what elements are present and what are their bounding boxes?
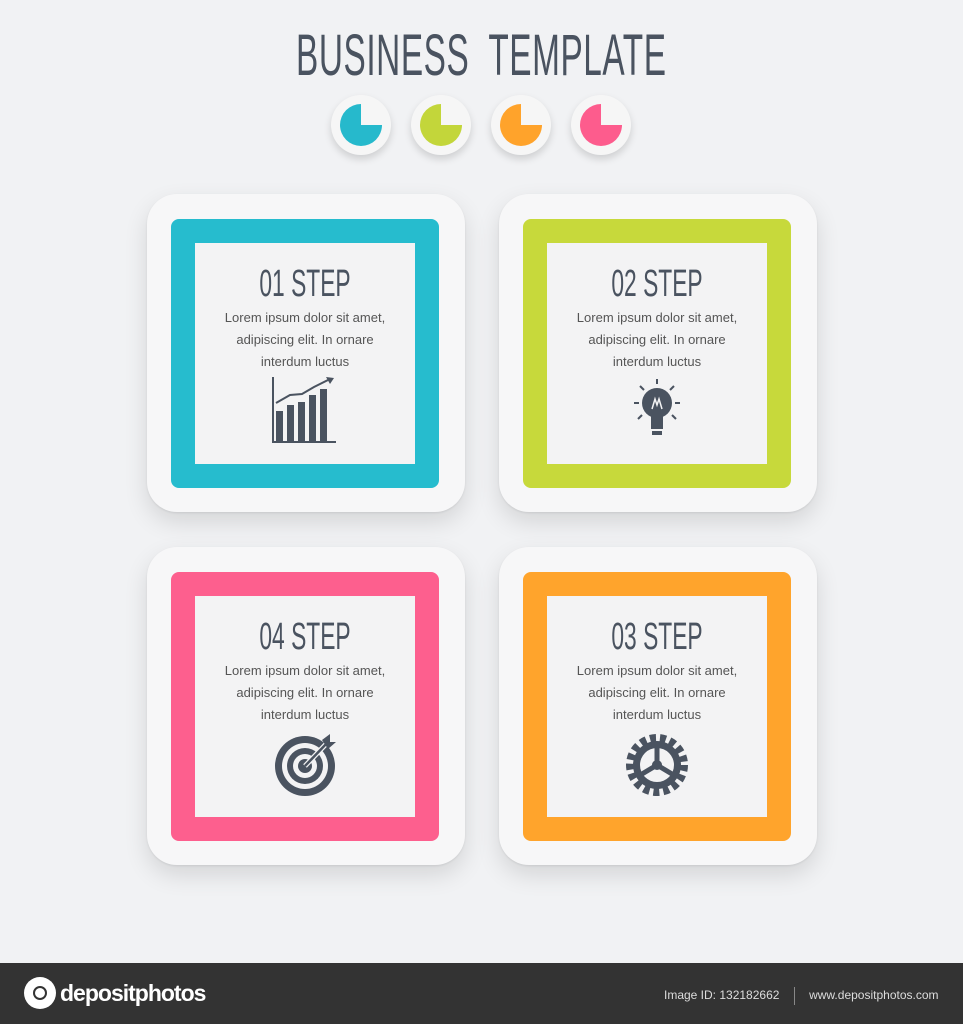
text block: adipiscing elit. In ornare [588,332,726,347]
text block [577,310,737,369]
text block: adipiscing elit. In ornare [236,685,374,700]
text block: Lorem ipsum dolor sit amet, [577,310,737,325]
text block [225,310,385,369]
icon: cyan pie [331,95,391,155]
text block: Lorem ipsum dolor sit amet, [225,310,385,325]
icon row: pie dots [328,104,634,162]
icon: gear [626,734,688,796]
panel: step 04 [147,547,465,865]
icon: orange pie [491,95,551,155]
heading: 03 step: 03 STEP [611,616,703,658]
footer bar [0,963,963,1024]
logo [24,977,206,1009]
icon: target [275,734,336,796]
icon: bar chart [272,377,336,443]
heading: 04 step: 04 STEP [259,616,351,658]
footer text: Image ID: 132182662 www.depositphotos.com [664,988,938,1002]
heading: 01 step: 01 STEP [259,263,351,305]
text block: interdum luctus [613,707,701,722]
icon: pink pie [571,95,631,155]
panel: step 01 [147,194,465,512]
text block: Lorem ipsum dolor sit amet, [225,663,385,678]
logo: depositphotos [60,980,205,1006]
text block: interdum luctus [261,354,349,369]
text block [577,663,737,722]
text block: Lorem ipsum dolor sit amet, [577,663,737,678]
text block: adipiscing elit. In ornare [588,685,726,700]
panel: step 03 [499,547,817,865]
heading: 02 step: 02 STEP [611,263,703,305]
text block [225,663,385,722]
panel: step 02 [499,194,817,512]
text block: interdum luctus [261,707,349,722]
text block: adipiscing elit. In ornare [236,332,374,347]
icon: lightbulb [634,379,680,435]
icon: green pie [411,95,471,155]
text block: interdum luctus [613,354,701,369]
title: BUSINESS TEMPLATE [296,23,667,88]
